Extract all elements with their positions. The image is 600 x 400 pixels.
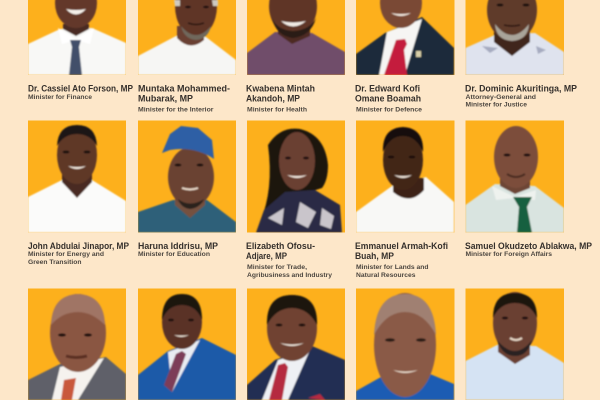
name: Haruna Iddrisu: Haruna Iddrisu, MP: [138, 241, 219, 252]
card: Haruna Iddrisu: [138, 120, 236, 258]
role: Trade, Agribusiness and Industry: Minister for Trade,: [247, 264, 307, 271]
portrait: third row, man in pale blue robe: [466, 288, 564, 400]
name: Elizabeth Ofosu-Adjare: Elizabeth Ofosu-: [246, 241, 315, 252]
card: Emmanuel Armah-Kofi Buah: [355, 120, 454, 279]
name: Cassiel Ato Forson: Dr. Cassiel Ato Forson, MP: [28, 84, 134, 94]
card: Samuel Okudzeto Ablakwa: [465, 120, 593, 258]
role: Minister for Foreign Affairs: Minister for Foreign Affairs: [466, 251, 552, 258]
portrait: Cassiel Ato Forson: [28, 0, 126, 75]
name: Kwabena Mintah Akandoh: Kwabena Mintah: [246, 84, 315, 94]
role: Minister for Health: Minister for Health: [247, 106, 307, 114]
role: Attorney-General: Attorney-General and: [466, 94, 536, 101]
role: Minister for Defence: Minister for Defence: [356, 106, 422, 114]
name second line: Mubarak, MP: [138, 94, 194, 104]
portrait: Emmanuel Armah-Kofi Buah: [356, 120, 454, 232]
name: Dominic Akuritinga: Dr. Dominic Akuritinga, MP: [465, 84, 578, 94]
name: Edward Kofi Omane Boamah: Dr. Edward Kofi: [355, 84, 420, 94]
card: Dominic Akuritinga: [465, 0, 578, 108]
role second line: Green Transition: [28, 259, 82, 266]
portrait: Muntaka Mohammed-Mubarak: [138, 0, 236, 75]
card: Kwabena Mintah Akandoh: [246, 0, 345, 114]
role: Minister for the Interior: Minister for the Interior: [138, 106, 214, 114]
role: Minister for Education: Minister for Education: [138, 251, 210, 258]
card: Edward Kofi Omane Boamah: [355, 0, 454, 114]
portrait: third row, man in blue suit: [138, 288, 236, 400]
portrait: third row, man in navy suit: [247, 288, 345, 400]
portrait: Samuel Okudzeto Ablakwa: [466, 120, 564, 232]
portrait: Dominic Akuritinga: [466, 0, 564, 75]
role: Lands and Natural Resources: Minister for Lands and: [356, 264, 428, 271]
role second line: Agribusiness and Industry: [247, 272, 332, 279]
name second line: Adjare, MP: [246, 251, 287, 262]
portrait: Edward Kofi Omane Boamah: [356, 0, 454, 75]
portrait: third row, bald man in blue shirt: [356, 288, 454, 400]
portrait: Elizabeth Ofosu-Adjare: [247, 120, 345, 232]
name: Emmanuel Armah-Kofi Buah: Emmanuel Armah-Kofi: [355, 241, 448, 252]
role second line: Natural Resources: [356, 272, 416, 279]
role: Minister for Finance: Minister for Finance: [28, 94, 92, 101]
card: Elizabeth Ofosu-Adjare: [246, 120, 345, 279]
role second line: Minister for Justice: [466, 102, 527, 108]
portrait: Kwabena Mintah Akandoh: [247, 0, 345, 75]
name second line: Omane Boamah: [355, 94, 421, 104]
card: John Abdulai Jinapor: [28, 120, 130, 266]
portrait: third row, bald man in grey suit: [28, 288, 126, 400]
name: John Abdulai Jinapor: John Abdulai Jinapor, MP: [28, 241, 130, 252]
role: Energy and Green Transition: Minister for Energy and: [28, 251, 104, 258]
portrait: Haruna Iddrisu: [138, 120, 236, 232]
name second line: Akandoh, MP: [246, 94, 301, 104]
name second line: Buah, MP: [355, 251, 395, 262]
card: Muntaka Mohammed-Mubarak: [138, 0, 236, 114]
name: Muntaka Mohammed-Mubarak: Muntaka Mohammed-: [138, 84, 230, 94]
card: Cassiel Ato Forson: [28, 0, 134, 101]
portrait: John Abdulai Jinapor: [28, 120, 126, 232]
